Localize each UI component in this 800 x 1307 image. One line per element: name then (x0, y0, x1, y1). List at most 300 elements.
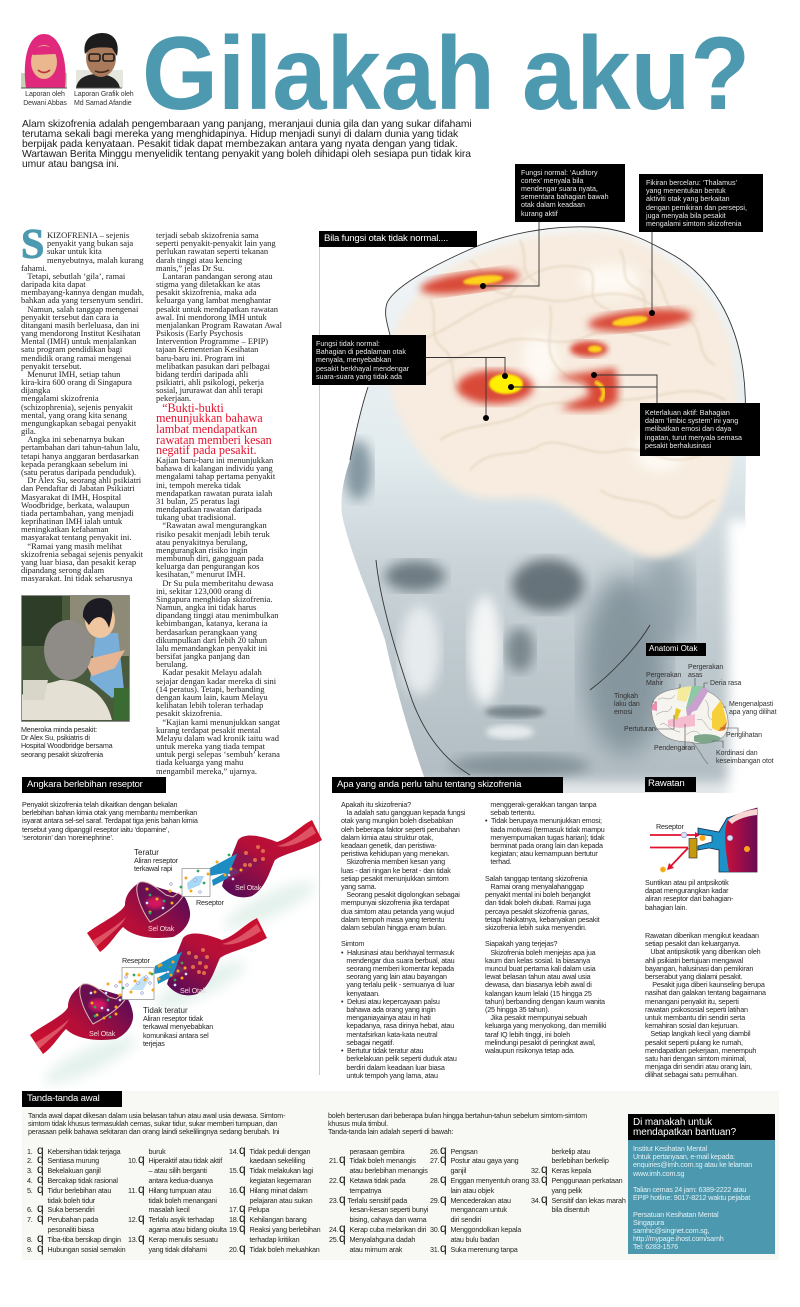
label: brain cell top right: Sel Otak (235, 883, 261, 892)
label: coordination: Kordinasi dan (716, 750, 758, 757)
byline: graphics: Md Samad Afandie (74, 100, 132, 107)
callout: auditory cortex: kurang aktif (521, 210, 558, 218)
checklist column 4: bising, cahaya dan warna (350, 1215, 426, 1224)
checklist column 1: Tiba-tiba bersikap dingin (48, 1235, 121, 1244)
article column 1: dijangka (21, 385, 50, 395)
facts column 1: berdiri dalam keadaan luar biasa (346, 1062, 445, 1072)
checklist column 2: agama atau bidang okulta (148, 1225, 227, 1234)
checklist column 3: 19. (229, 1225, 238, 1234)
intro paragraph: Alam skizofrenia adalah pengembaraan yang panjang, meranjaui dunia gila dan yang sukar difahami (22, 119, 472, 130)
article column 1: bahkan ada yang tersenyum sendiri. (21, 295, 143, 305)
facts column 1: keadaan genetik, dan peristiwa- (341, 841, 437, 850)
label: recognising: Mengenalpasti (729, 701, 773, 708)
facts column 1: • Delusi atau kepercayaan palsu (341, 997, 440, 1006)
label: recognising: apa yang dilihat (729, 709, 776, 716)
callout: thalamus (639, 174, 763, 232)
checklist column 2: – atau silih berganti (148, 1166, 207, 1175)
photo: Dr Alex Su with patient (22, 596, 130, 722)
article column 1: penyakit tersebut. (21, 361, 81, 371)
article column 2 lower: “Kajian kami menunjukkan sangat (162, 716, 280, 726)
byline: report (23, 90, 67, 107)
checklist column 1: q (37, 1172, 44, 1186)
article column 2 upper: awal. Ini mendorong IMH untuk (156, 312, 267, 322)
checklist column 5: Suka merenung tanpa (450, 1245, 518, 1254)
article column 2 upper (156, 230, 282, 403)
treatment text: nasihat dan galakan tentang bagaimana (645, 988, 766, 997)
article column 1: Namun, salah tanggap mengenai (27, 304, 138, 314)
checklist column 1: Bekelakuan ganjil (48, 1166, 101, 1175)
article column 2 lower: berdasarkan perangkaan yang (156, 627, 257, 637)
callout: abnormal function: Bahagian di pedalaman otak (316, 348, 406, 356)
checklist column 6: Keras kepala (552, 1166, 591, 1175)
facts column 2: menggerak-gerakkan tangan tanpa (490, 800, 596, 809)
article column 2 upper: bidang terdiri daripada ahli (156, 369, 248, 379)
title: Gilakah aku? (142, 16, 750, 132)
checklist column 1: tidak boleh tidur (48, 1196, 95, 1205)
checklist column 1: 8. (27, 1235, 33, 1244)
checklist column 1: q (37, 1142, 44, 1156)
article column 2 lower: membunuh diri, gangguan pada (156, 553, 264, 563)
article column 1: yang mendorong Institut Kesihatan (21, 328, 141, 338)
article column 2 lower: mengalami tahap pertama penyakit (156, 471, 275, 481)
facts column 2: menyempurnakan tugas harian); tidak (490, 833, 604, 842)
callout: thalamus: Fikiran bercelaru: ‘Thalamus’ (646, 179, 737, 187)
article column 2 lower: ini, sekitar 123,000 orang di (156, 586, 252, 596)
checklist column 3: 20. (229, 1245, 238, 1254)
checklist column 5: q (440, 1241, 447, 1255)
facts column 2: kegiatan; atau kemampuan bertutur (490, 849, 598, 858)
facts column 2: tetapi hakikatnya, kebanyakan pesakit (485, 915, 599, 924)
checklist column 6: berlebihan berkelip (552, 1156, 609, 1165)
checklist column 4: 23. (329, 1196, 338, 1205)
facts column 1: • Halusinasi atau berkhayal termasuk (341, 948, 454, 957)
checklist column 5: 30. (430, 1225, 439, 1234)
synapse: organised flow (87, 820, 322, 952)
article column 1: tetapi hanya anggaran berdasarkan (21, 451, 139, 461)
facts column 2: kalangan kaum lelaki (15 hingga 25 (485, 989, 592, 998)
label: brain cell top left: Sel Otak (148, 924, 174, 933)
checklist column 2: Terlalu asyik terhadap (148, 1215, 214, 1224)
treatment text: setiap pesakit dan keluarganya. (645, 939, 740, 948)
byline: graphics: Laporan Grafik oleh (74, 91, 134, 98)
checklist column 2: yang tidak difahami (148, 1245, 207, 1254)
checklist column 4: atau mimum arak (350, 1245, 402, 1254)
early signs intro left (28, 1111, 286, 1136)
treatment caption (645, 878, 734, 912)
article column 1: tiada pertambahan, yang menjadi (21, 508, 134, 518)
article column 2 lower (156, 455, 280, 776)
article column 1: mengungkapkan sebagai penyakit (21, 418, 136, 428)
checklist column 1: 5. (27, 1186, 33, 1195)
checklist column 1: 3. (27, 1166, 33, 1175)
facts column 2: skizofrenia lebih suka menyendiri. (485, 923, 586, 932)
checklist column 1: q (37, 1162, 44, 1176)
label: disorganised: Tidak teratur (143, 1006, 188, 1015)
article column 1: penyakit tersebut dan cara ia (21, 312, 118, 322)
facts column 1: Apakah itu skizofrenia? (341, 800, 411, 809)
illustration: head with brain (342, 222, 746, 793)
checklist column 1: Tidur berlebihan atau (48, 1186, 111, 1195)
checklist column 6: 34. (531, 1196, 540, 1205)
article column 1: membayang-kannya dengan mudah, (21, 287, 144, 297)
checklist column 5: q (440, 1142, 447, 1156)
facts column 1: mempunyai skizofrenia jika terdapat (341, 898, 449, 907)
article column 2 upper: keluarga yang lambat menghantar (156, 295, 271, 305)
heading: treatment (645, 777, 696, 792)
checklist column 2: Hiperaktif atau tidak aktif (148, 1156, 222, 1165)
callout: auditory cortex (515, 164, 625, 222)
early signs intro right: boleh berterusan dari beberapa bulan hingga bertahun-tahun sebelum simtom-simtom (328, 1111, 587, 1120)
article column 2 lower: Singapura menghidap skizofrenia. (156, 594, 272, 604)
label: receptor treatment: Reseptor (656, 822, 684, 831)
article column 2 upper: pekerjaan. (156, 393, 191, 403)
article column 2 lower: mendapatkan rawatan daripada (156, 504, 262, 514)
checklist column 2: antara kedua-duanya (148, 1176, 213, 1185)
facts column 1: Ia adalah satu gangguan kepada fungsi (346, 808, 465, 817)
treatment text: Ubat antipsikotik yang diberikan oleh (650, 947, 760, 956)
early signs intro left: Tanda awal dapat dikesan dalam usia belasan tahun atau awal usia dewasa. Simtom- (28, 1111, 285, 1120)
label: basic movement: asas (688, 672, 702, 679)
intro paragraph (22, 119, 472, 170)
checklist column 1: Kebersihan tidak terjaga (48, 1146, 120, 1156)
callout: auditory cortex: otak dalam keadaan (521, 201, 585, 209)
checklist column 5: 26. (430, 1146, 439, 1156)
checklist column 3: Hilang minat dalam (250, 1186, 308, 1195)
facts column 2: melindungi pesakit di peringkat awal, (485, 1038, 595, 1047)
article column 2 upper: manis,” jelas Dr Su. (156, 263, 224, 273)
receptor box bottom (122, 968, 154, 1000)
treatment text: pesakit seperti pulang ke rumah, (645, 1038, 743, 1047)
article column 2 lower: tukang ubat tradisional. (156, 512, 236, 522)
label: behaviour: emosi (614, 709, 632, 716)
checklist column 3: 17. (229, 1205, 238, 1214)
facts column 2: lewat belasan tahun atau awal usia (485, 972, 590, 981)
pull quote: rawatan memberi kesan (156, 433, 272, 447)
checklist column 4 (329, 1146, 428, 1254)
treatment text: untuk membantu diri sendiri serta (645, 1013, 745, 1022)
treatment text: menjaga diri sendiri atau orang lain, (645, 1062, 752, 1071)
label: organised: Teratur (134, 848, 159, 857)
receptors paragraph: ‘serotonin’ dan ‘noreinephrine’. (22, 833, 114, 842)
article column 1: menyebutnya, malah kurang (47, 255, 144, 265)
article column 2 lower: mengurangkan risiko ingin (156, 545, 248, 555)
checklist column 2: 11. (128, 1186, 137, 1195)
facts column 1: dalam tempoh masa yang tertentu (341, 915, 444, 924)
checklist column 4: q (339, 1152, 346, 1166)
article column 1: keprihatinan IMH ialah untuk (21, 516, 122, 526)
label: basic movement: Pergerakan (688, 664, 723, 671)
facts column 1: dalam kimia atau struktur otak, (341, 833, 433, 842)
article column 2 lower: Namun, angka ini tidak harus (156, 602, 256, 612)
help box (628, 1114, 775, 1254)
article column 2 upper: Psikosis (Early Psychosis (156, 328, 243, 338)
checklist column 2: q (138, 1182, 145, 1196)
label: receptor bottom: Reseptor (122, 956, 150, 965)
intro paragraph: terutama sekali bagi mereka yang menghidapinya. Hidup menjadi sunyi di dalam dunia yang tidak (22, 129, 458, 140)
article column 1: Masyarakat di IMH, Hospital (21, 492, 121, 502)
checklist column 1: q (37, 1211, 44, 1225)
checklist column 4: 21. (329, 1156, 338, 1165)
checklist column 5: 28. (430, 1176, 439, 1185)
early signs intro right: Tanda-tanda lain adalah seperti di bawah: (328, 1127, 453, 1136)
pull quote: menunjukkan bahawa (156, 411, 263, 425)
article column 2 lower: berulang. (156, 659, 188, 669)
checklist column 1: q (37, 1231, 44, 1245)
checklist column 5: 31. (430, 1245, 439, 1254)
checklist column 3: terhadap kritikan (250, 1235, 299, 1244)
label: disorganised: Aliran reseptor tidak (143, 1014, 203, 1023)
heading: receptors (22, 777, 166, 793)
checklist column 5: Postur atau gaya yang (450, 1156, 518, 1165)
facts column 2: penyakit mental ini boleh berjangkit (485, 890, 590, 899)
article column 2 lower: lalu memandangkan penyakit ini (156, 643, 267, 653)
callout: abnormal function: menyala, menyebabkan (316, 356, 391, 364)
checklist column 3: Kehilangan barang (250, 1215, 307, 1224)
checklist column 3: Pelupa (248, 1205, 269, 1214)
checklist column 4: Ketawa tidak pada (350, 1176, 405, 1185)
facts column 1: berkelakuan pelik seperti duduk atau (346, 1054, 457, 1063)
article column 1: kira-kira 600 orang di Singapura (21, 377, 132, 387)
checklist column 5: Pengsan (450, 1146, 478, 1156)
checklist column 5: q (440, 1221, 447, 1235)
hotspot 1 (419, 265, 521, 299)
intro paragraph: Wartawan Berita Minggu menyelidik tentang penyakit yang boleh dihidapi oleh sesiapa pun tidak kira (22, 149, 471, 160)
facts column 1: yang sama. (341, 882, 376, 891)
checklist column 3: Reaksi yang berlebihan (250, 1225, 320, 1234)
facts column 1: Skizofrenia memberi kesan yang (346, 857, 445, 866)
facts column 1: bahawa ada orang yang ingin (346, 1005, 436, 1014)
label: coordination (716, 750, 774, 765)
facts column 1: dua simtom atau petanda yang wujud (341, 907, 454, 916)
facts column 2: Skizofrenia boleh menjejas apa jua (490, 948, 595, 957)
facts column 2: keluarga yang menyokong, dan memiliki (485, 1021, 606, 1030)
callout: auditory cortex: sementara bahagian bawah (521, 193, 609, 201)
checklist column 3: kaedaan sekeliling (250, 1156, 305, 1165)
article column 1: penyakit yang bukan saja (47, 238, 133, 248)
checklist column 4: perasaan gembira (350, 1146, 404, 1156)
facts column 1: Simtom (341, 939, 364, 948)
article column 1: Woodbridge, berkata, walaupun (21, 500, 129, 510)
checklist column 1: 9. (27, 1245, 33, 1254)
checklist column 6: q (541, 1162, 548, 1176)
article column 2 lower: kesihatan,” menurut IMH. (156, 569, 245, 579)
article column 2 upper: baru-baru ini. Program ini (156, 353, 245, 363)
treatment text (645, 931, 766, 1079)
early signs intro right (328, 1111, 587, 1136)
brain anatomy diagram (651, 678, 738, 764)
checklist column 6: bila disentuh (552, 1205, 589, 1214)
checklist column 1: Suka bersendiri (48, 1205, 95, 1214)
checklist column 2: 13. (128, 1235, 137, 1244)
facts column 2: percaya pesakit skizofrenia ganas, (485, 907, 589, 916)
checklist column 6: yang pelik (552, 1186, 582, 1195)
label: hearing: Pendengaran (654, 745, 695, 752)
facts column 1: sebagai negatif. (346, 1038, 394, 1047)
pull quote (156, 400, 272, 457)
facts column 2: Salah tanggap tentang skizofrenia (485, 874, 587, 883)
byline: graphics (74, 90, 134, 107)
article column 1: daripada kita dapat (21, 279, 86, 289)
checklist column 2: q (138, 1231, 145, 1245)
checklist column 6: q (541, 1192, 548, 1206)
checklist column 2: tidak boleh menangani (148, 1196, 217, 1205)
article column 2 lower: dikumpulkan dari lebih 20 tahun (156, 635, 267, 645)
facts column 2: Siapakah yang terjejas? (485, 939, 557, 948)
facts column 2: walaupun risikonya tetap ada. (485, 1046, 575, 1055)
help box text: Tel: 6283-1576 (633, 1242, 678, 1251)
heading: early signs: Tanda-tanda awal (27, 1093, 100, 1104)
help box text: samhic@singnet.com.sg, (633, 1226, 709, 1235)
receptors paragraph (22, 800, 198, 842)
article column 1: mental, yang orang kita senang (21, 410, 127, 420)
article column 1: Menurut IMH, setiap tahun (27, 369, 120, 379)
help box heading: mendapatkan bantuan? (633, 1127, 736, 1138)
treatment text: berserabut yang dialami pesakit. (645, 972, 742, 981)
pull quote: lambat mendapatkan (156, 422, 257, 436)
article column 2 upper: terjadi sebab skizofrenia sama (156, 230, 259, 240)
facts column 2: Jika pesakit mempunyai sebuah (490, 1013, 587, 1022)
article column 1: masyarakat. Ini tidak seharusnya (21, 573, 132, 583)
article column 1: fahami. (21, 263, 47, 273)
treatment text: menangani penyakit itu, seperti (645, 997, 739, 1006)
treatment text: Pesakit juga diberi kaunseling berupa (652, 980, 765, 989)
article column 1: “Ramai yang masih melihat (27, 541, 122, 551)
heading: receptors: Angkara berlebihan reseptor (27, 779, 143, 790)
checklist column 2 (128, 1146, 227, 1254)
article column 2 lower: mendapatkan rawatan purata ialah (156, 488, 272, 498)
hotspot 4 (457, 370, 533, 404)
article column 2 lower: 31 bulan, 25 peratus lagi (156, 496, 240, 506)
checklist column 4: 24. (329, 1225, 338, 1234)
article column 2 lower: untuk pergi selepas ‘sembuh’ kerana (156, 749, 280, 759)
article column 1: yang luar biasa, dan pesakit kerap (21, 557, 136, 567)
checklist column 5: q (440, 1192, 447, 1206)
help box text: Singapura (633, 1218, 664, 1227)
article column 2 upper: perlukan rawatan seperti tekanan (156, 246, 268, 256)
label: skilled movement: Pergerakan (646, 672, 681, 679)
callout: auditory cortex: Fungsi normal: ‘Auditory (521, 168, 598, 176)
label: basic movement (688, 664, 723, 679)
checklist column 3: Tidak boleh meluahkan (250, 1245, 320, 1254)
article column 2 lower: bahawa di kalangan individu yang (156, 463, 273, 473)
facts column 2: tiada motivasi (termasuk tidak mampu (490, 825, 605, 834)
checklist column 3: pelajaran atau sukan (250, 1196, 312, 1205)
article column 1: masyarakat tentang penyakit ini. (21, 532, 131, 542)
article column 1: kepada perangkaan sebelum ini (21, 459, 128, 469)
article column 2 upper: tajaan Kementerian Kesihatan (156, 344, 258, 354)
label: organised (134, 848, 178, 873)
checklist column 4: Menyalahguna dadah (350, 1235, 415, 1244)
checklist column 4: Terlalu sensitif pada (348, 1196, 407, 1205)
treatment caption: bahagian lain. (645, 903, 687, 912)
label: skilled movement (646, 672, 681, 687)
checklist column 6: q (541, 1172, 548, 1186)
label: brain cell bottom right: Sel Otak (180, 986, 206, 995)
facts column 2: dan tidak boleh diubati. Ramai juga (485, 898, 591, 907)
article column 2 lower: dengan kaum lain, kaum Melayu (156, 692, 268, 702)
photo caption: Meneroka minda pesakit: (21, 725, 97, 734)
checklist column 1: q (37, 1241, 44, 1255)
treatment diagram: receptor blocked (650, 808, 757, 872)
intro paragraph: berpijak pada kenyataan. Pesakit tidak dapat membezakan antara yang nyata dengan yang tidak. (22, 139, 458, 150)
checklist column 2: 10. (128, 1156, 137, 1165)
callout: limbic system: melibatkan emosi dan daya (645, 425, 731, 433)
help box text: EPIP hotline: 9017-8212 waktu pejabat (633, 1193, 750, 1202)
checklist column 2: buruk (148, 1146, 166, 1156)
heading: what to know: Apa yang anda perlu tahu tentang skizofrenia (337, 779, 521, 790)
callout: thalamus: yang menentukan bentuk (646, 187, 726, 195)
help box text: Untuk pertanyaan, e-mail kepada: (633, 1152, 735, 1161)
facts column 1: oleh beberapa faktor seperti perubahan (341, 825, 460, 834)
checklist column 6: 32. (531, 1166, 540, 1175)
article column 2 lower: dipandang tinggi atau menimbulkan (156, 610, 279, 620)
checklist column 1 (27, 1142, 126, 1255)
checklist column 2: q (138, 1152, 145, 1166)
checklist column 5: q (440, 1152, 447, 1166)
treatment caption: aliran reseptor dari bahagian- (645, 894, 733, 903)
checklist column 5 (430, 1142, 529, 1255)
label: receptor top: Reseptor (196, 898, 224, 907)
article column 2 lower: mengambil mereka,” ujarnya. (156, 766, 257, 776)
facts column 2: sebab tertentu. (490, 808, 536, 817)
heading: anatomy: Anatomi Otak (649, 644, 697, 653)
facts column 2: dewasa, dan biasanya lebih awal di (485, 980, 592, 989)
article column 2 upper: sosial, jururawat dan ahli terapi (156, 385, 263, 395)
brain (389, 232, 737, 558)
article column 2 lower: keluarga dan pengurangan kos (156, 561, 259, 571)
checklist column 5: Enggan menyentuh orang (450, 1176, 529, 1185)
vertical divider (318, 246, 320, 1075)
callout: auditory cortex: mendengar suara nyata, (521, 185, 598, 193)
checklist column 3: 18. (229, 1215, 238, 1224)
article column 1: Angka ini sebenarnya bukan (27, 434, 124, 444)
help box text: enquiries@imh.com.sg atau ke lelaman (633, 1160, 752, 1169)
checklist column 4: q (339, 1231, 346, 1245)
callout: limbic system: pesakit berhalusinasi (645, 442, 711, 450)
hotspot 2 (587, 306, 693, 334)
checklist column 6: 33. (531, 1176, 540, 1185)
facts column 2: kaum dan kelas sosial. Ia biasanya (485, 956, 590, 965)
checklist column 3: Tidak melakukan lagi (250, 1166, 313, 1175)
intro paragraph: umur atau bangsa ini. (22, 159, 119, 170)
checklist column 4: q (339, 1221, 346, 1235)
checklist column 3: q (239, 1162, 246, 1176)
label: behaviour (614, 692, 640, 716)
head outline (350, 227, 745, 775)
treatment text: mendapatkan pekerjaan, menempuh (645, 1046, 756, 1055)
hotspot 3 (570, 341, 608, 357)
callout: thalamus: mengalami simtom skizofrenia (646, 220, 741, 228)
treatment caption: dapat mengurangkan kadar (645, 886, 728, 895)
article column 2 lower: untuk mereka yang tiada tempat (156, 741, 265, 751)
checklist column 5: 27. (430, 1156, 439, 1165)
facts column 1: menganiayainya atau iri hati (346, 1013, 431, 1022)
article column 2 lower: kelihatan lebih toleran terhadap (156, 700, 263, 710)
receptors paragraph: berlebihan bahan kimia otak yang membantu memberikan (22, 808, 197, 817)
checklist column 6 (531, 1146, 626, 1214)
checklist column 1: 2. (27, 1156, 33, 1165)
callout: abnormal function: Fungsi tidak normal: (316, 340, 380, 348)
facts column 1: mendengar dua suara berbual, atau (346, 956, 454, 965)
facts column 1: otak yang mungkin boleh disebabkan (341, 816, 453, 825)
facts column 1: kenyataan. (346, 989, 380, 998)
photo caption: Hospital Woodbridge bersama (21, 741, 112, 750)
checklist column 1: 7. (27, 1215, 33, 1224)
article column 2 lower: sejajar dengan kadar mereka di sini (156, 676, 276, 686)
article column 2 lower: pesakit skizofrenia. (156, 708, 222, 718)
pull quote: negatif pada pesakit. (156, 443, 257, 457)
callout: thalamus: dengan pemikiran dan persepsi, (646, 204, 747, 212)
